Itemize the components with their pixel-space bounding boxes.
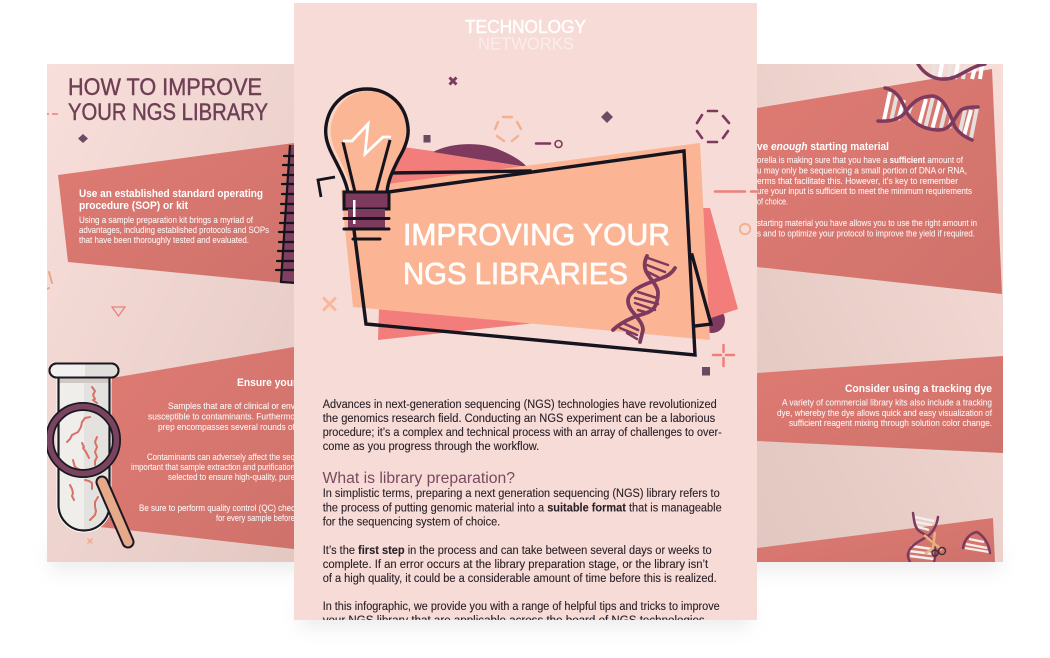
heading: SOP: procedure (SOP) or kit [79,200,188,212]
text block: introduction: the genomics research field. Conducting an NGS experiment can be a laborious [323,411,715,425]
shape: salmon bottom triangle [378,309,545,340]
text block: library preparation: of a high quality, it could be a considerable amount of time before this is realized. [323,571,717,585]
icon: DNA fragment [963,532,990,553]
icon: magnifier ring [50,406,116,474]
heading: SOP [79,188,263,212]
panel: centre cover page [294,3,757,627]
text: tracking dye body [777,398,993,428]
text: ensure body: Be sure to perform quality control (QC) chec [139,503,296,513]
text block: library preparation [323,486,722,627]
text: ensure body: susceptible to contaminants. Furthermo [148,412,295,422]
heading: what is library preparation: What is library preparation? [322,470,515,487]
panel: ensure your sample [100,347,298,549]
panel: right page [755,64,1003,562]
title: how to improve: YOUR NGS LIBRARY [68,99,268,126]
shape: purple dome [433,144,527,167]
text: SOP body: Using a sample preparation kit brings a myriad of [79,215,253,225]
panel: enough starting material [757,64,1002,294]
text block: library preparation: for the sequencing system of choice. [323,515,500,529]
text: starting material body: orella is making sure that you have a sufficient amount of [757,155,963,165]
text block: library preparation: your NGS library that are applicable across the board of NGS technologies [323,613,705,627]
text block: introduction: procedure; it’s a complex and technical process with an array of challenges to over- [323,425,722,439]
icon: DNA with scissors [908,513,946,562]
text block: library preparation: In simplistic terms, preparing a next generation sequencing (NGS) library refers to [323,486,720,500]
text: SOP body [79,215,270,245]
title: improving your NGS libraries: NGS LIBRARIES [403,256,628,291]
logo: Technology Networks [465,16,586,54]
icon: hero DNA [613,256,675,342]
text: ensure body [131,401,296,523]
text: tracking dye body: A variety of commercial library kits also include a tracking [782,398,992,408]
panel: tracking dye [757,356,1003,453]
icon: spiral notebook [276,145,297,283]
logo: Technology Networks: TECHNOLOGY [465,16,586,37]
text block: introduction: come as you progress through the workflow. [323,439,539,453]
text: tracking dye body: sufficient reagent mixing through solution color change. [789,418,992,428]
text: SOP body: advantages, including established protocols and SOPs [79,225,270,235]
title: improving your NGS libraries: IMPROVING YOUR [403,217,670,252]
text: ensure body: prep encompasses several rounds of [158,422,296,432]
text: ensure body: important that sample extraction and purification [131,462,295,472]
icon: light bulb [326,89,408,239]
text block: library preparation: In this infographic, we provide you with a range of helpful tips and tricks to improve [323,599,720,613]
icon: top DNA [918,64,985,80]
text: starting material body: of choice. [757,196,788,206]
icon: magnifier handle [102,482,128,542]
text: ensure body: Contaminants can adversely affect the seq [147,452,295,462]
text: ensure body: Samples that are of clinical or env [168,401,296,411]
title: how to improve: HOW TO IMPROVE [68,74,262,101]
decorations around the hero [323,78,757,376]
icon: bulb base [344,192,389,239]
shape: black frame [345,151,695,355]
shape: corner bracket [318,177,335,197]
heading: SOP: Use an established standard operating [79,188,263,200]
text block: library preparation: complete. If an error occurs at the library preparation stage, or the library isn’t [323,557,709,571]
shape: salmon right panel [700,208,738,320]
hero illustration [318,78,757,376]
text block: library preparation: It’s the first step in the process and can take between several days or weeks to [323,543,712,557]
shape: purple half circle [699,307,725,333]
panel: bottom band [757,518,995,562]
panel: left page [47,64,298,562]
icon: test tube with magnifier [50,364,128,542]
logo: Technology Networks: NETWORKS [478,34,574,54]
text: starting material body: s and to optimize your protocol to improve the yield if required. [757,228,975,238]
text block: introduction: Advances in next-generation sequencing (NGS) technologies have revolutionized [323,397,717,411]
title: how to improve [68,78,268,120]
text: tracking dye body: dye, whereby the dye allows quick and easy visualization of [777,408,993,418]
icon: contaminants [67,387,98,520]
heading: tracking dye: Consider using a tracking dye [845,383,992,395]
left page decorations [47,114,125,544]
shape: back frame [390,171,711,326]
icon: DNA helix [878,88,978,140]
shape: peach banner [341,143,710,340]
text block: introduction [323,397,722,453]
text: starting material body: u may only be sequencing a small portion of DNA or RNA, [757,166,967,176]
shape: salmon back panel [378,147,530,188]
text: SOP body: that have been thoroughly tested and evaluated. [79,235,249,245]
icon: filament [343,124,391,154]
text block: library preparation: the process of putting genomic material into a suitable format that is manageable [323,500,722,514]
text: starting material body: erms that facilitate this. However, it’s key to remember [757,176,958,186]
text: starting material body [757,155,977,238]
page shadows [50,545,1000,628]
text: ensure body: selected to ensure high-quality, pure [168,472,295,482]
heading: ensure: Ensure your [237,377,298,389]
text: starting material body: starting material you have allows you to use the right amount in [757,218,977,228]
title: improving your NGS libraries [403,217,670,291]
text: starting material body: ure your input is sufficient to meet the minimum requirements [757,186,973,196]
heading: enough starting material: ve enough starting material [757,141,889,153]
text: ensure body: for every sample before [216,513,295,523]
panel: standard operating procedure [58,143,297,284]
